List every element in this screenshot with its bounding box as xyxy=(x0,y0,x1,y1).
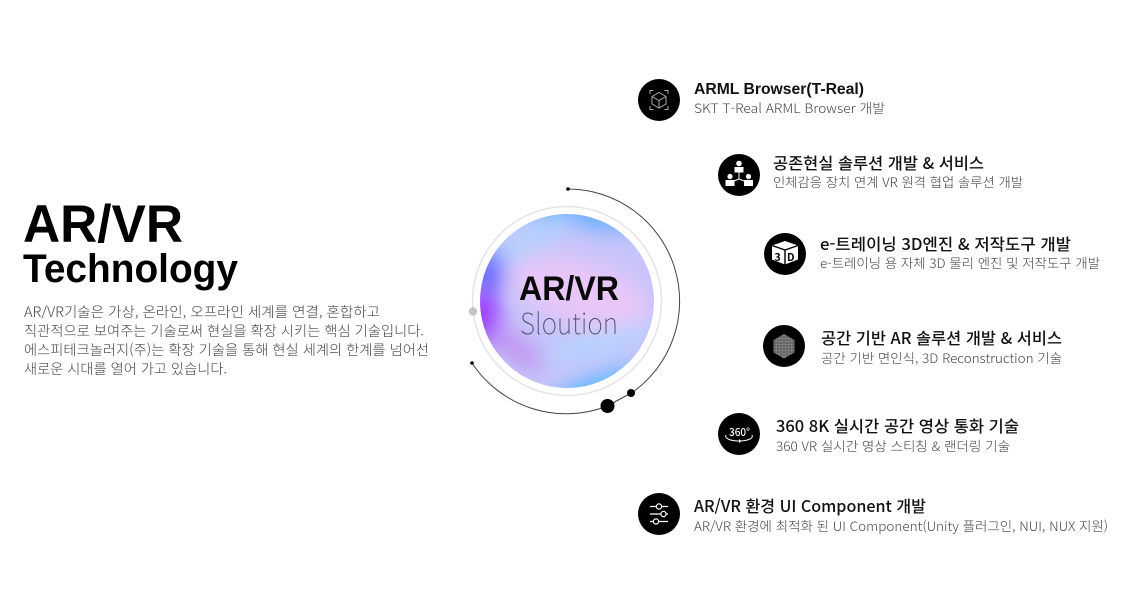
item: ARML Browser: SKT T-Real ARML Browser 개발 xyxy=(694,98,885,117)
orb label: Sloution xyxy=(520,301,618,343)
intro text block xyxy=(24,302,429,379)
item: ARML Browser: ARML Browser(T-Real) xyxy=(694,81,864,98)
item: mixed reality solution: 공존현실 솔루션 개발 & 서비스 xyxy=(773,150,984,174)
item: ARML Browser xyxy=(638,79,885,121)
item: e-training 3D engine: e-트레이닝 용 자체 3D 물리 엔진 및 저작도구 개발 xyxy=(820,253,1100,272)
icon: 3D box: D xyxy=(787,250,794,265)
item: spatial AR solution xyxy=(763,325,1062,367)
item: 360 8K video call xyxy=(718,413,1019,455)
central gradient orb xyxy=(480,214,654,388)
item: e-training 3D engine xyxy=(764,231,1100,275)
item: UI component: AR/VR 환경에 최적화 된 UI Component(Unity 플러그인, NUI, NUX 지원) xyxy=(694,516,1108,535)
item: mixed reality solution: 인체감응 장치 연계 VR 원격 협업 솔루션 개발 xyxy=(773,172,1023,191)
icon: 360 degrees: 360° xyxy=(729,424,750,440)
item: spatial AR solution: 공간 기반 면인식, 3D Reconstruction 기술 xyxy=(821,348,1062,367)
intro text block: AR/VR기술은 가상, 온라인, 오프라인 세계를 연결, 혼합하고 xyxy=(24,302,380,322)
icon: 360 degrees xyxy=(718,413,760,455)
orb label: AR/VR xyxy=(519,270,619,308)
icon: mesh hexagon xyxy=(763,325,805,367)
item: UI component: AR/VR 환경 UI Component 개발 xyxy=(694,493,926,517)
icon: 3D box: 3 xyxy=(774,250,781,265)
icon: network of people xyxy=(718,154,760,196)
orb label xyxy=(519,270,619,343)
icon: sliders xyxy=(638,493,680,535)
title: AR/VR xyxy=(23,195,183,254)
item: 360 8K video call: 360 VR 실시간 영상 스티칭 & 랜더링 기술 xyxy=(776,436,1010,455)
icon: 3D box xyxy=(764,233,806,275)
intro text block: 에스피테크놀러지(주)는 확장 기술을 통해 현실 세계의 한계를 넘어선 xyxy=(24,340,429,360)
item: e-training 3D engine: e-트레이닝 3D엔진 & 저작도구 개발 xyxy=(820,231,1071,255)
title xyxy=(23,195,239,291)
intro text block: 직관적으로 보여주는 기술로써 현실을 확장 시키는 핵심 기술입니다. xyxy=(24,321,424,341)
icon: AR cube xyxy=(638,79,680,121)
item: spatial AR solution: 공간 기반 AR 솔루션 개발 & 서비스 xyxy=(821,325,1062,349)
intro text block: 새로운 시대를 열어 가고 있습니다. xyxy=(24,359,227,379)
item: UI component xyxy=(638,493,1108,535)
title: Technology xyxy=(23,247,239,291)
orbit diagram xyxy=(469,187,680,414)
item: 360 8K video call: 360 8K 실시간 공간 영상 통화 기술 xyxy=(776,413,1019,437)
item: mixed reality solution xyxy=(718,150,1023,196)
